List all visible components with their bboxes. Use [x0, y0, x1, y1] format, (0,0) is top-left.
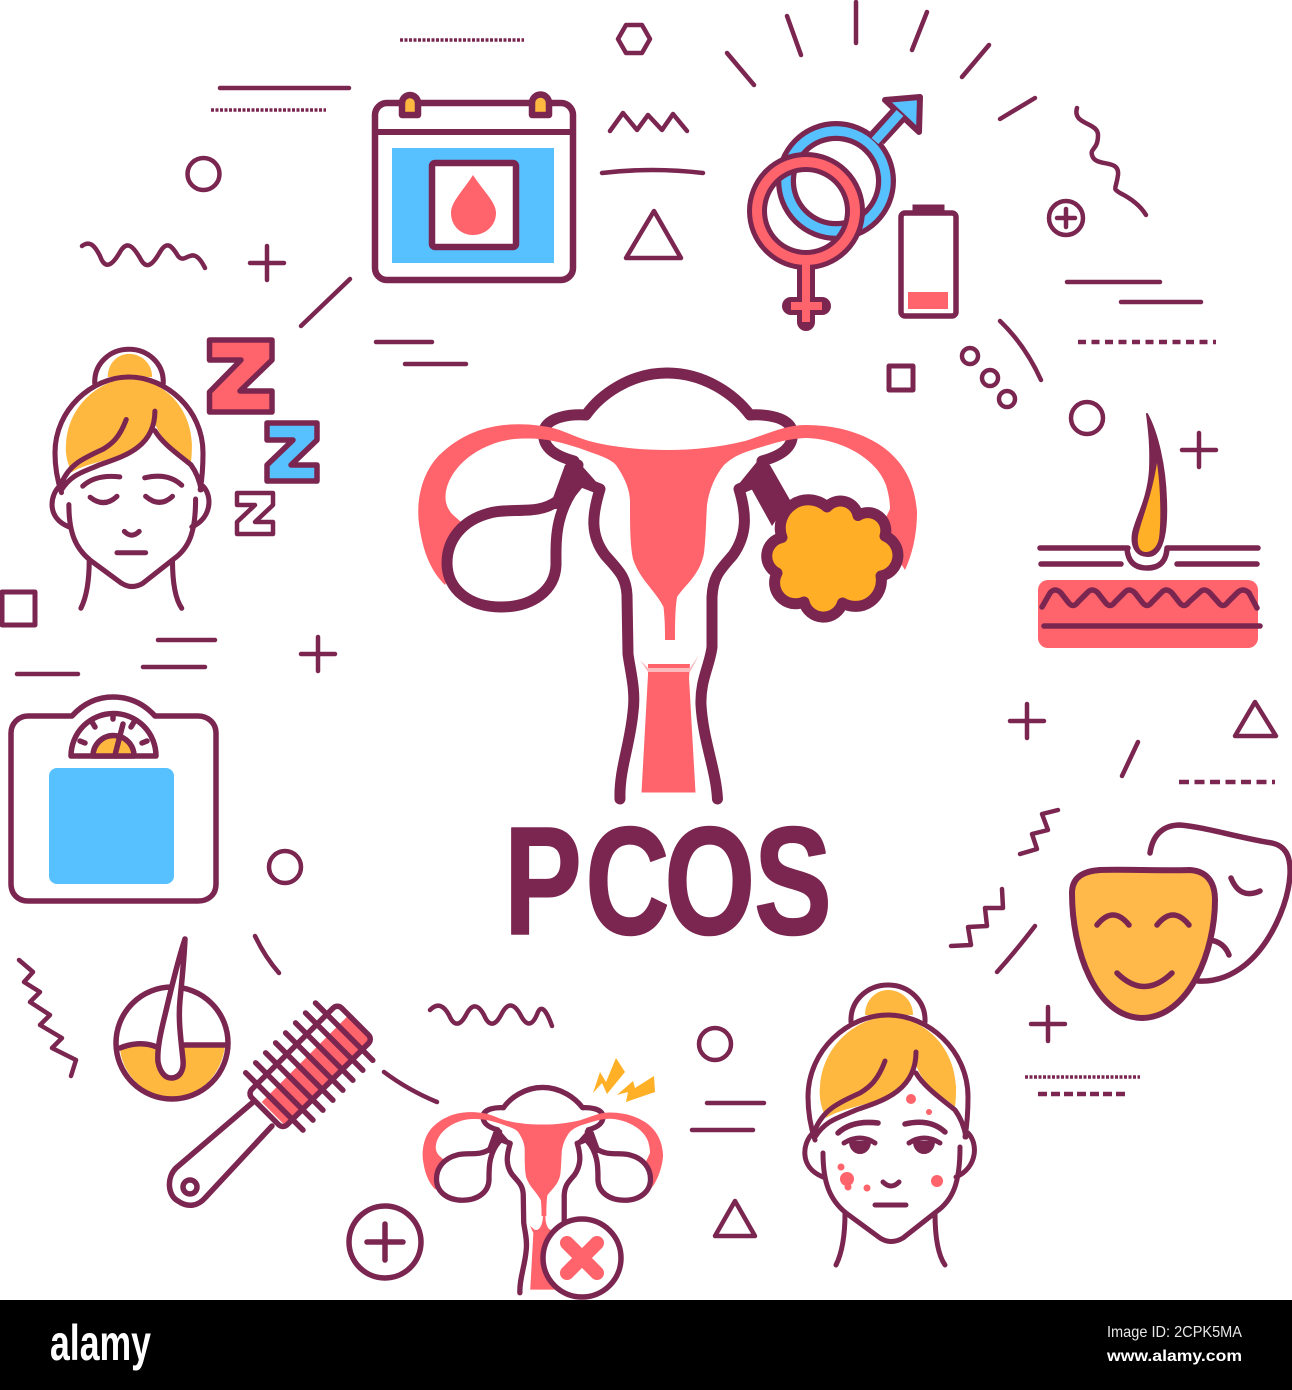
brand logo: alamy [50, 1315, 151, 1371]
icon: small uterus with pain and cross [423, 1058, 663, 1297]
icon: letters Z [210, 340, 317, 534]
image id: Image ID: 2CPK5MA [1107, 1324, 1242, 1341]
title: PCOS [504, 794, 832, 967]
icon: woman face with acne [805, 985, 974, 1265]
icon: mood masks [1072, 825, 1290, 1018]
icon: calendar with blood drop [375, 94, 573, 280]
icon: low battery [901, 206, 956, 316]
icon: hair follicle on skin [1038, 414, 1260, 648]
icon: sleepy woman face [52, 349, 209, 608]
website: www.alamy.com [1106, 1348, 1242, 1365]
icon: male and female symbols [757, 97, 920, 322]
icon: bathroom scale [11, 697, 216, 901]
icon: hair root circle [116, 939, 228, 1099]
icon: main uterus with polycystic ovary [418, 373, 917, 799]
icon: hair brush [169, 992, 383, 1205]
footer bar [0, 1300, 1292, 1390]
